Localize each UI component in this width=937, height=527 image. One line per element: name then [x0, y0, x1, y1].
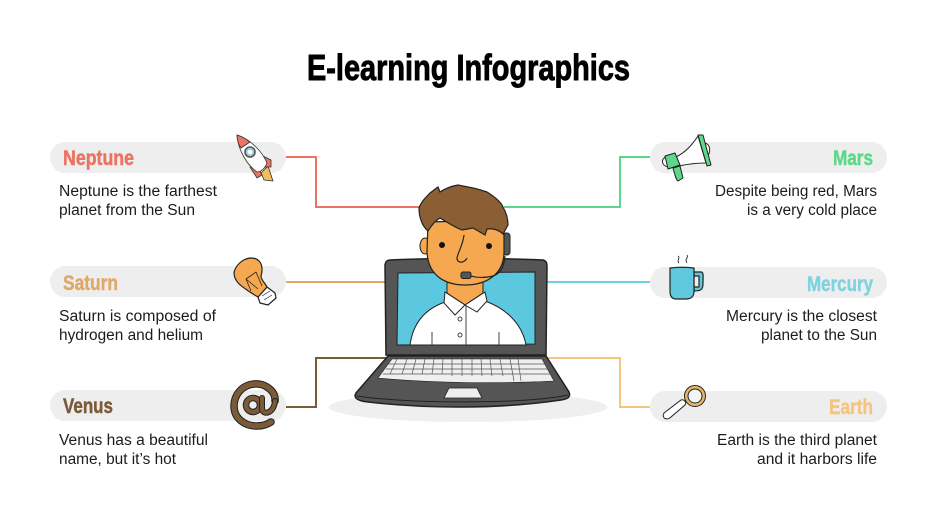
panel: Mars: Despite being red, Mars — [715, 183, 877, 200]
panel: Mercury: planet to the Sun — [761, 327, 877, 344]
panel: Neptune: Neptune is the farthest — [59, 183, 218, 200]
panel: Earth — [650, 391, 887, 468]
panel: Earth: and it harbors life — [757, 451, 877, 468]
connector: Earth — [545, 358, 650, 407]
headset mic — [461, 256, 505, 278]
panel: Venus — [50, 390, 286, 468]
illustration: person at laptop — [355, 185, 570, 407]
panel: Saturn — [50, 266, 286, 344]
icon: light bulb — [234, 258, 276, 305]
panel: Neptune: Neptune — [63, 147, 134, 170]
panel: Neptune: planet from the Sun — [59, 202, 195, 219]
trackpad — [444, 388, 482, 398]
hair — [419, 185, 508, 235]
panel: Saturn: Saturn — [63, 272, 118, 295]
panel: Mars — [650, 142, 887, 219]
icon: rocket — [237, 135, 273, 181]
panel: Venus: Venus — [63, 395, 113, 418]
headset earpiece — [503, 233, 510, 255]
shirt buttons — [432, 305, 499, 345]
icon: megaphone — [662, 135, 711, 181]
connector: Saturn — [286, 281, 386, 283]
ground shadow — [329, 392, 607, 422]
panel: Venus: Venus has a beautiful — [59, 432, 208, 449]
collar — [444, 292, 487, 315]
panel: Mercury: Mercury — [807, 273, 873, 296]
connector: Mars — [504, 157, 650, 207]
connector: Mercury — [546, 281, 650, 283]
panel: Neptune — [50, 142, 286, 219]
laptop base — [355, 356, 570, 407]
panel: Mercury: Mercury is the closest — [726, 308, 878, 325]
title: E-learning Infographics — [307, 47, 630, 88]
neck — [447, 280, 483, 305]
panel: Mars: is a very cold place — [747, 202, 877, 219]
eyes and nose — [439, 235, 492, 262]
laptop screen — [397, 272, 535, 345]
shirt — [410, 301, 526, 345]
panel: Earth: Earth is the third planet — [717, 432, 878, 449]
ear — [420, 238, 430, 254]
connector: Venus — [286, 358, 386, 407]
panel: Mercury — [650, 267, 887, 344]
face — [427, 220, 504, 285]
panel: Venus: name, but it’s hot — [59, 451, 177, 468]
icon: at sign — [234, 384, 275, 426]
laptop base lip — [357, 395, 568, 402]
connector: Neptune — [286, 157, 422, 207]
icon: magnifying glass — [663, 386, 706, 419]
panel: Saturn: hydrogen and helium — [59, 327, 203, 344]
keyboard — [378, 359, 554, 383]
panel: Mars: Mars — [833, 147, 873, 170]
panel: Earth: Earth — [829, 396, 873, 419]
icon: coffee mug — [670, 255, 703, 299]
laptop lid — [385, 258, 547, 355]
panel: Saturn: Saturn is composed of — [59, 308, 217, 325]
